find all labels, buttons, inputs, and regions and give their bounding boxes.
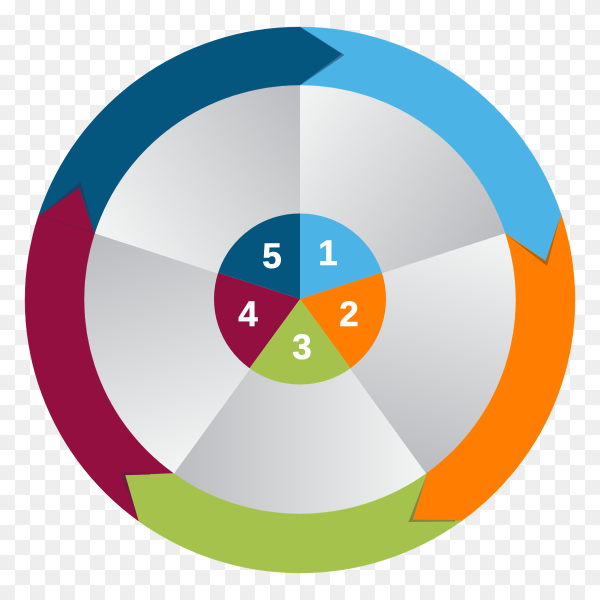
arrow 4: maroon [25,188,173,521]
arrow 5: dark blue [38,27,342,233]
shadow: maroon arrow tip [43,182,94,231]
shadow: orange arrow tip [408,474,455,522]
number 1: 1 [318,234,338,273]
pie slice 2 [300,273,386,368]
shadow: light blue arrow tip [506,217,560,266]
number 5: 5 [262,237,282,276]
shadow: green arrow tip [120,472,150,520]
arrow 1: light blue [300,27,562,261]
sector 2 [260,176,551,493]
pie slice 4 [214,273,300,368]
arrowhead shadows [39,27,560,522]
sector 5 [64,44,406,377]
number labels [238,234,359,367]
shadow: dark blue arrow tip [301,27,344,85]
pie slice 5 [218,214,300,299]
seam line under maroon arrow head [39,215,95,233]
panel: metallic sectors [49,44,551,522]
pie slice 1 [300,214,382,299]
number 2: 2 [339,295,359,334]
sector 4 [49,176,340,493]
pie slice 3 [250,299,350,384]
sector 3 [170,300,430,522]
arrow 3: green [125,473,462,573]
number 4: 4 [238,295,258,334]
arrow 2: orange [413,216,575,521]
chart: centre pie [214,214,386,384]
sector 1 [194,44,536,377]
number 3: 3 [292,328,312,367]
